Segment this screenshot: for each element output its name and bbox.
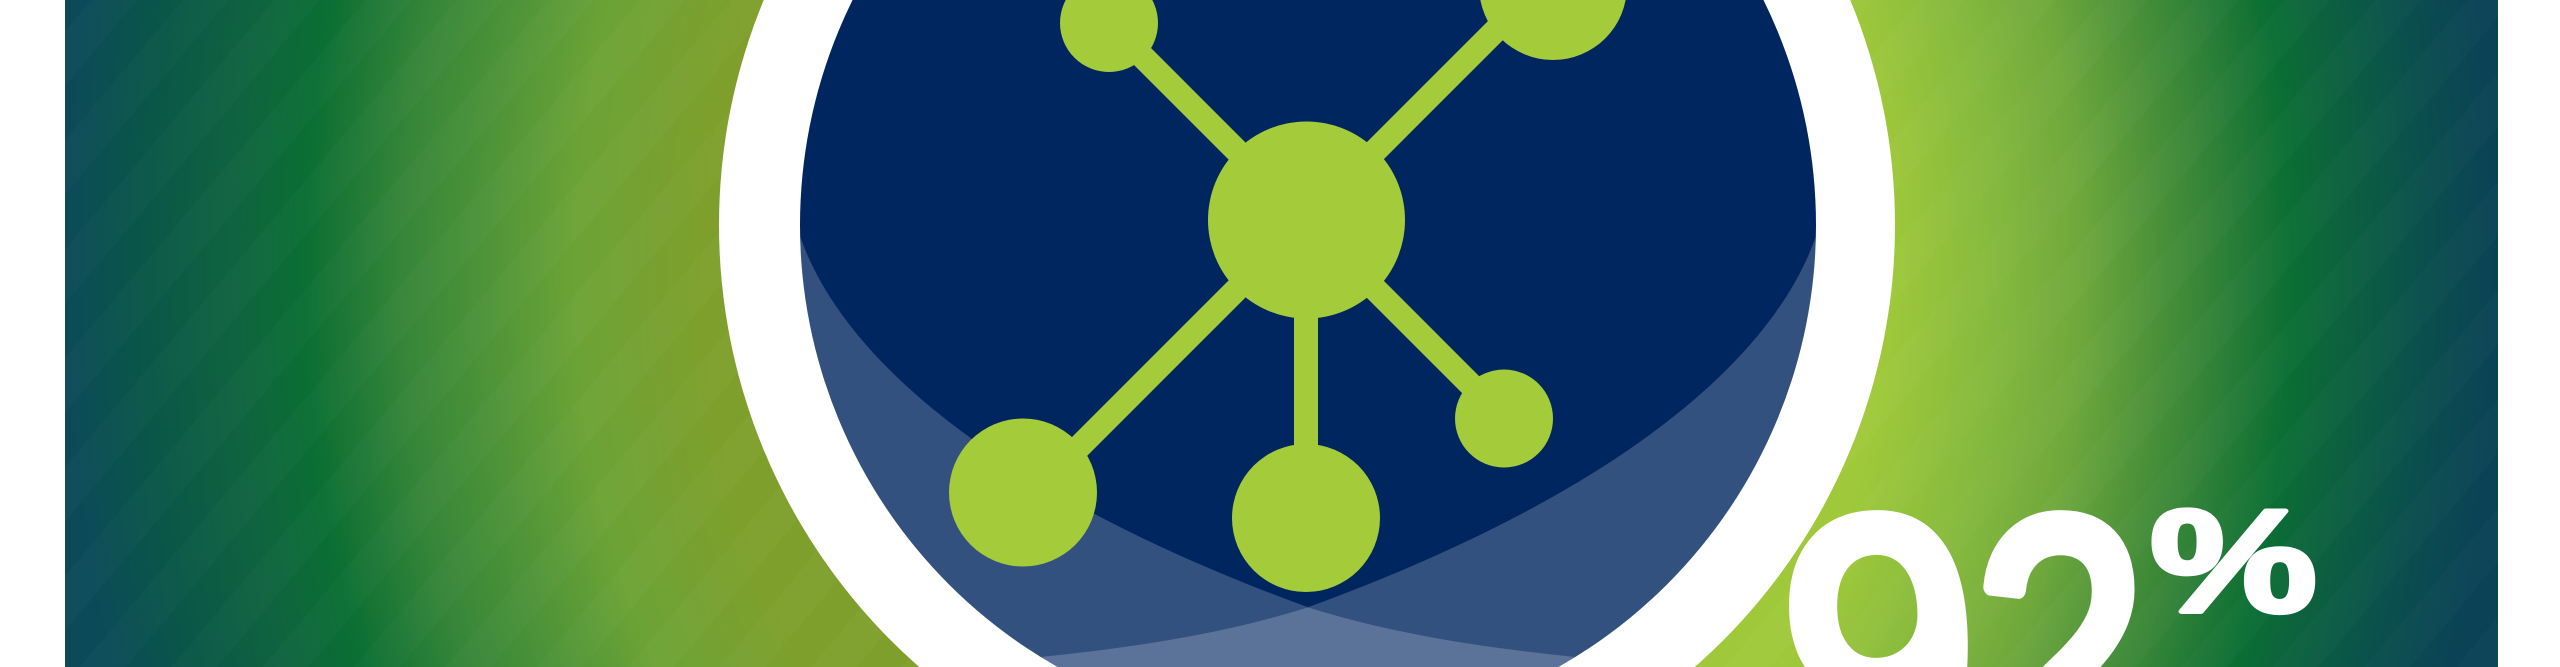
icon: molecule network xyxy=(949,0,1627,592)
statistic: 92 percent xyxy=(1781,443,2317,667)
statistic: 92 percent: % xyxy=(2150,480,2317,642)
white ring around badge xyxy=(719,0,1895,667)
navy badge disc xyxy=(800,0,1816,667)
